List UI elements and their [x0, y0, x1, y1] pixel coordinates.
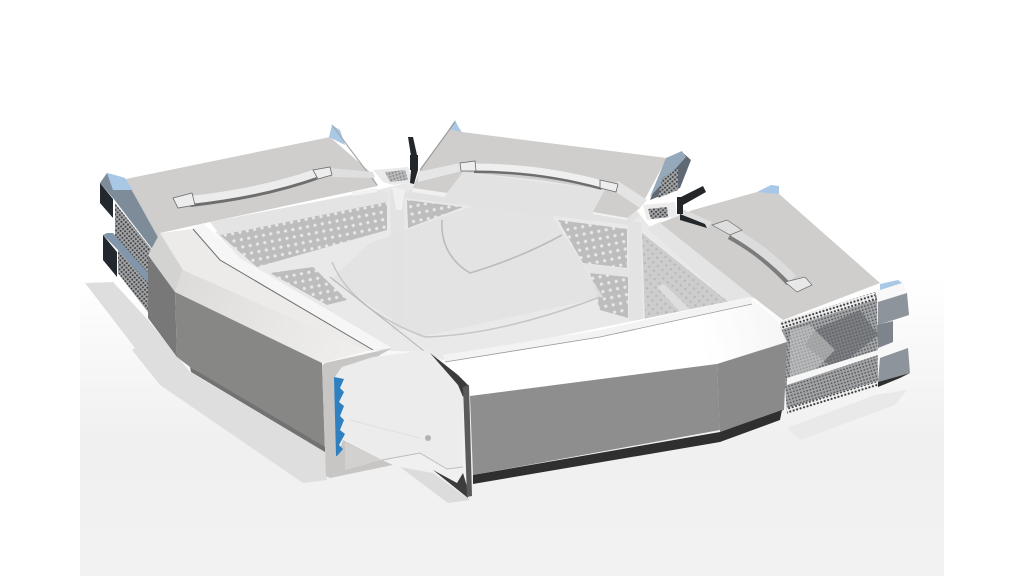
transparent curved sheet	[330, 185, 603, 358]
rear vent between centre and right panels	[650, 151, 691, 200]
handle: right	[712, 220, 812, 292]
icon: black knob right	[677, 186, 707, 228]
icon: black knob left	[408, 137, 418, 184]
interior floor	[215, 170, 755, 360]
floor shadows	[85, 282, 907, 503]
perforated walls	[220, 190, 753, 330]
panel: right top cover	[660, 185, 880, 320]
duct opening interior	[335, 350, 463, 469]
flange: right dark plate	[430, 353, 472, 498]
vent: right stacked with fan	[769, 280, 910, 414]
arms and hubs	[330, 122, 712, 228]
duct: front left	[148, 223, 392, 452]
flange: left plate	[322, 348, 393, 478]
vent: left stacked	[100, 173, 160, 312]
panel: centre top cover	[412, 120, 667, 220]
handle: left	[173, 167, 332, 208]
duct: front right	[443, 297, 787, 484]
icon: blue absorber sawtooth	[334, 377, 345, 456]
panel: left top cover	[126, 125, 390, 242]
handle: centre	[460, 161, 618, 192]
